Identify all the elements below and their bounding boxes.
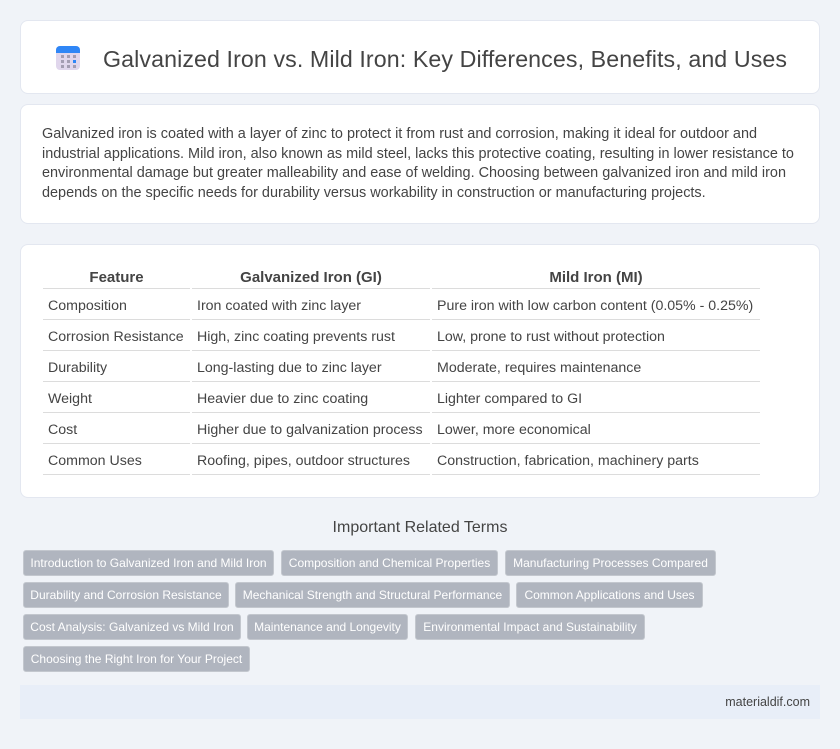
text: High, zinc coating prevents rust	[197, 329, 395, 345]
intro text: depends on the specific needs for durability versus workability in construction or manufacturing projects.	[42, 185, 706, 201]
tags: related terms: Environmental Impact and Sustainability	[423, 620, 637, 634]
intro text: environmental damage but greater malleability and ease of welding. Choosing between galvanized iron and mild iron	[42, 165, 786, 181]
text: Mild Iron (MI)	[549, 269, 643, 286]
text: Roofing, pipes, outdoor structures	[197, 453, 410, 469]
text: Lighter compared to GI	[437, 391, 582, 407]
tags: related terms: Maintenance and Longevity	[254, 620, 401, 634]
intro text	[42, 126, 794, 201]
icon: calendar	[56, 46, 80, 70]
tags: related terms: Durability and Corrosion Resistance	[30, 588, 222, 602]
tags: related terms: Introduction to Galvanized Iron and Mild Iron	[30, 556, 267, 570]
tags: related terms	[23, 550, 716, 672]
tags: related terms: Choosing the Right Iron for Your Project	[31, 652, 242, 666]
panel: comparison table	[20, 244, 820, 498]
tags: related terms: Common Applications and Uses	[524, 588, 695, 602]
text: Long-lasting due to zinc layer	[197, 360, 382, 376]
tags: related terms: Cost Analysis: Galvanized vs Mild Iron	[30, 620, 234, 634]
text: Cost	[48, 422, 77, 438]
tags: related terms: Manufacturing Processes Compared	[513, 556, 708, 570]
text: Durability	[48, 360, 107, 376]
text: Composition	[48, 298, 127, 314]
text: Iron coated with zinc layer	[197, 298, 361, 314]
intro text: industrial applications. Mild iron, also known as mild steel, lacks this protective coating, resulting in lower resistance to	[42, 146, 794, 162]
text: Heavier due to zinc coating	[197, 391, 368, 407]
text: Common Uses	[48, 453, 142, 469]
text: Corrosion Resistance	[48, 329, 184, 345]
tags: related terms: Mechanical Strength and Structural Performance	[243, 588, 502, 602]
heading: related terms: Important Related Terms	[333, 519, 507, 536]
text: Galvanized Iron (GI)	[240, 269, 382, 286]
title: Galvanized Iron vs. Mild Iron: Key Differences, Benefits, and Uses	[103, 46, 787, 72]
footer text: materialdif.com	[725, 695, 810, 709]
text: Weight	[48, 391, 92, 407]
panel: introduction	[20, 104, 820, 224]
header panel	[20, 20, 820, 94]
text: Higher due to galvanization process	[197, 422, 423, 438]
intro text: Galvanized iron is coated with a layer of zinc to protect it from rust and corrosion, making it ideal for outdoor and	[42, 126, 757, 142]
comparison table	[43, 266, 760, 476]
text: Moderate, requires maintenance	[437, 360, 641, 376]
text: Construction, fabrication, machinery parts	[437, 453, 699, 469]
text: Feature	[89, 269, 144, 286]
text: Pure iron with low carbon content (0.05% - 0.25%)	[437, 298, 753, 314]
tags: related terms: Composition and Chemical Properties	[289, 556, 490, 570]
text: Low, prone to rust without protection	[437, 329, 665, 345]
text: Lower, more economical	[437, 422, 591, 438]
footer bar	[20, 685, 820, 719]
